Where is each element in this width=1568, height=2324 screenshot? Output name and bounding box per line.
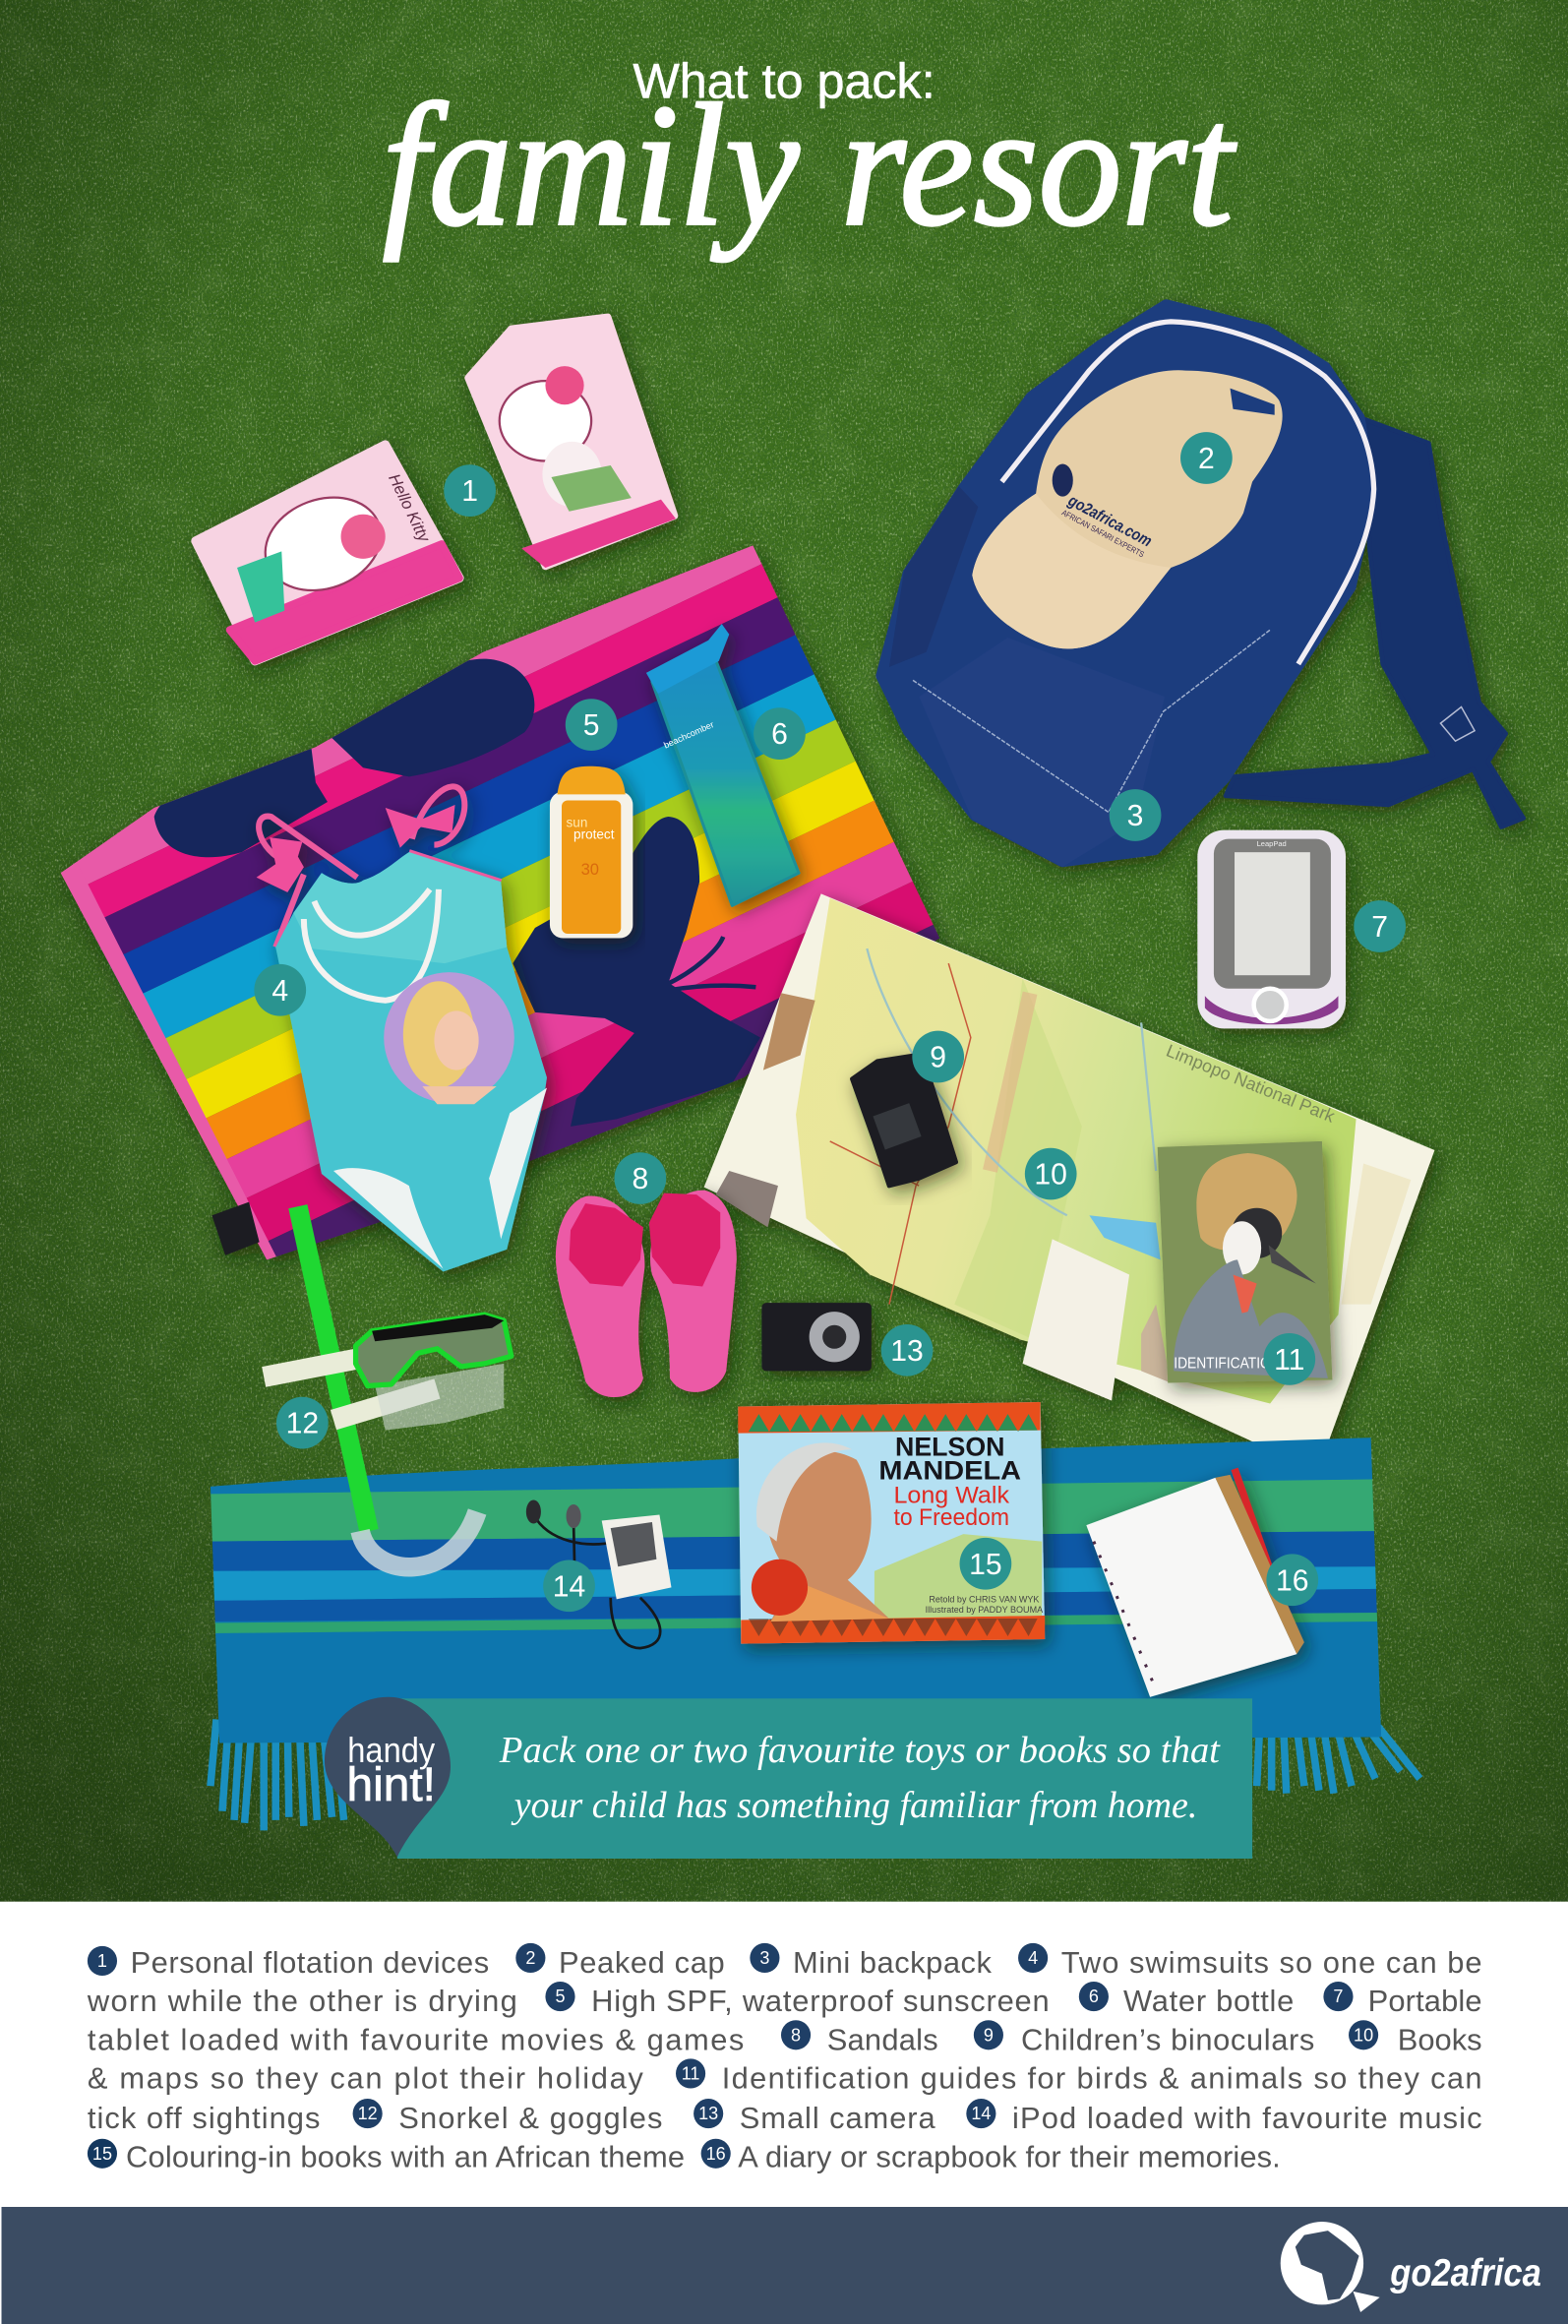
item: flotation devices [196, 317, 676, 661]
badge 13: 13 [890, 1335, 924, 1368]
strap stitch [1440, 707, 1475, 741]
logo globe [1281, 2222, 1380, 2312]
legend line 5: Snorkel & goggles [398, 2101, 662, 2135]
item: map book [704, 893, 1434, 1472]
legend line 5 [88, 2099, 1482, 2135]
legend line 4: 11 [682, 2063, 699, 2083]
legend line 1: 1 [97, 1951, 107, 1971]
book title: NELSON [895, 1431, 1004, 1461]
towel silhouette: butterfly [513, 817, 760, 1127]
goggle straps [264, 1359, 437, 1420]
snorkel mouthpiece [360, 1512, 477, 1567]
item: sarong [193, 1423, 1419, 1830]
legend line 5: 12 [358, 2104, 378, 2123]
legend line 2: Water bottle [1123, 1984, 1294, 2018]
badge 5 [566, 699, 618, 751]
legend line 2: Portable [1368, 1984, 1482, 2018]
item: nelson mandela book [738, 1402, 1045, 1644]
badge 9 [912, 1031, 964, 1082]
legend line 5: iPod loaded with favourite music [1012, 2101, 1482, 2135]
sarong fringe [211, 1719, 1419, 1830]
legend line 2: 5 [555, 1987, 566, 2006]
legend line 2: High SPF, waterproof sunscreen [591, 1984, 1050, 2018]
handy hint callout [325, 1697, 1252, 1859]
legend text [87, 1943, 1482, 2173]
badge 16: 16 [1276, 1564, 1309, 1597]
footer bar [2, 2207, 1568, 2324]
badge 15 [960, 1538, 1011, 1590]
badge 1: 1 [461, 475, 478, 508]
snorkel tube [298, 1206, 369, 1531]
legend line 6: Colouring-in books with an African theme [126, 2139, 685, 2173]
legend line 3: Sandals [827, 2022, 938, 2056]
item: identification guide [1158, 1141, 1332, 1382]
badge 1 [444, 464, 496, 517]
towel label tag [211, 1202, 260, 1255]
badge 16 [1266, 1554, 1318, 1606]
legend line 5: 14 [971, 2104, 991, 2123]
legend line 5: Small camera [740, 2101, 936, 2135]
cap logo text: go2africa.com [1064, 491, 1155, 551]
item: sunscreen: protect [573, 827, 615, 842]
towel silhouette: ears [154, 747, 328, 857]
legend line 1: 3 [759, 1948, 769, 1968]
badge 2 [1180, 432, 1233, 484]
peaked cap [972, 370, 1283, 648]
title line: family resort: family resort [383, 69, 1236, 262]
badge 11 [1263, 1333, 1315, 1385]
legend line 3: 10 [1354, 2025, 1373, 2045]
badge 13 [881, 1324, 933, 1376]
item: water bottle [646, 624, 799, 905]
legend line 6 [88, 2139, 1281, 2173]
hint banner [397, 1698, 1252, 1859]
legend line 5: tick off sightings [88, 2101, 320, 2135]
badge 2: 2 [1198, 443, 1215, 475]
item: mini backpack [881, 305, 1524, 867]
item: tablet [1197, 830, 1346, 1028]
hint text: Pack one or two favourite toys or books so that [499, 1730, 1222, 1771]
badge 7: 7 [1371, 911, 1388, 944]
title [383, 53, 1236, 262]
item: identification guide: IDENTIFICATION [1174, 1355, 1281, 1372]
legend line 1 [88, 1943, 1482, 1980]
goggle skirt [375, 1364, 504, 1431]
swimsuit portrait [384, 972, 514, 1104]
book title: to Freedom [893, 1504, 1009, 1531]
swimsuit straps and bows [257, 786, 501, 948]
cap logo text [1053, 463, 1155, 560]
legend line 6: 15 [92, 2144, 112, 2164]
badge 3 [1110, 789, 1161, 841]
badge 6 [754, 707, 806, 760]
legend line 6: A diary or scrapbook for their memories. [738, 2139, 1281, 2173]
legend line 4: Identification guides for birds & animals so they can [722, 2060, 1482, 2095]
legend line 2 [87, 1982, 1482, 2018]
hint teardrop [325, 1697, 451, 1857]
item: sandals [556, 1191, 737, 1397]
legend line 6: 16 [706, 2144, 726, 2164]
item: diary and pencil [1086, 1469, 1304, 1697]
badge 10 [1025, 1148, 1077, 1199]
item: sunscreen: sun [567, 816, 587, 830]
legend line 3: 9 [984, 2025, 994, 2045]
hint text [499, 1730, 1222, 1826]
legend line 3 [88, 2020, 1482, 2056]
book title [878, 1431, 1043, 1615]
badge 12 [276, 1397, 329, 1448]
logo wordmark: go2africa [1389, 2252, 1541, 2294]
item: snorkel and goggles [264, 1206, 512, 1567]
badge 4 [254, 964, 306, 1016]
legend line 2: 7 [1333, 1987, 1343, 2006]
hint label: handy [347, 1730, 435, 1770]
item: water bottle: beachcomber [662, 719, 715, 751]
badge 7 [1354, 900, 1406, 952]
item: beach towel [59, 545, 950, 1273]
badge 11: 11 [1274, 1344, 1304, 1376]
legend line 3: tablet loaded with favourite movies & games [88, 2022, 744, 2056]
legend line 1: 2 [525, 1948, 535, 1968]
item: binoculars [852, 1056, 956, 1186]
legend line 1: 4 [1028, 1948, 1038, 1968]
badge 14 [543, 1560, 595, 1612]
badge 15: 15 [969, 1549, 1002, 1581]
title line: what to pack: What to pack: [633, 53, 935, 108]
hint label [347, 1730, 436, 1811]
white legend panel [0, 1902, 1568, 2207]
legend line 1: Mini backpack [793, 1945, 992, 1980]
item: flotation devices: Hello Kitty [385, 470, 435, 546]
item: map book: Limpopo National Park [1164, 1041, 1339, 1127]
item: sunscreen: 30 [581, 860, 599, 879]
badge 8: 8 [632, 1163, 648, 1195]
badge 6: 6 [771, 718, 788, 751]
badge 3: 3 [1127, 800, 1143, 832]
legend line 5: 13 [698, 2104, 718, 2123]
item: tablet: LeapPad [1257, 839, 1287, 848]
book title: Long Walk [893, 1482, 1010, 1508]
badge 8 [614, 1152, 666, 1204]
book title: MANDELA [878, 1454, 1021, 1485]
legend line 3: Books [1398, 2022, 1482, 2056]
legend line 1: Personal flotation devices [131, 1945, 489, 1980]
backpack body [881, 305, 1371, 861]
item: ipod and earphones [526, 1499, 671, 1648]
legend line 2: 6 [1089, 1987, 1099, 2006]
badge 9: 9 [930, 1042, 946, 1074]
item: swimsuit [257, 786, 547, 1271]
badge 10: 10 [1034, 1159, 1067, 1192]
hint label: hint! [347, 1758, 436, 1811]
badge 12: 12 [286, 1408, 319, 1440]
go2africa logo [1281, 2222, 1541, 2312]
legend line 4: & maps so they can plot their holiday [88, 2060, 643, 2095]
item: sunscreen [550, 766, 633, 939]
badge 4: 4 [271, 975, 288, 1008]
goggles [356, 1315, 512, 1385]
legend line 1: Peaked cap [559, 1945, 725, 1980]
book title: Illustrated by PADDY BOUMA [926, 1605, 1043, 1615]
backpack strap [1226, 419, 1524, 827]
book title: Retold by CHRIS VAN WYK [929, 1594, 1039, 1604]
legend line 2: worn while the other is drying [87, 1984, 517, 2018]
badge 5: 5 [583, 709, 600, 742]
legend line 1: Two swimsuits so one can be [1061, 1945, 1482, 1980]
numbered badges [254, 432, 1406, 1612]
zipper piping [1001, 322, 1374, 664]
badge 14: 14 [553, 1570, 585, 1603]
hint text: your child has something familiar from home. [511, 1785, 1197, 1826]
item: camera [761, 1303, 872, 1371]
legend line 3: Children’s binoculars [1021, 2022, 1314, 2056]
cap logo text: AFRICAN SAFARI EXPERTS [1060, 509, 1146, 560]
legend line 4 [88, 2058, 1482, 2095]
legend line 3: 8 [791, 2025, 801, 2045]
